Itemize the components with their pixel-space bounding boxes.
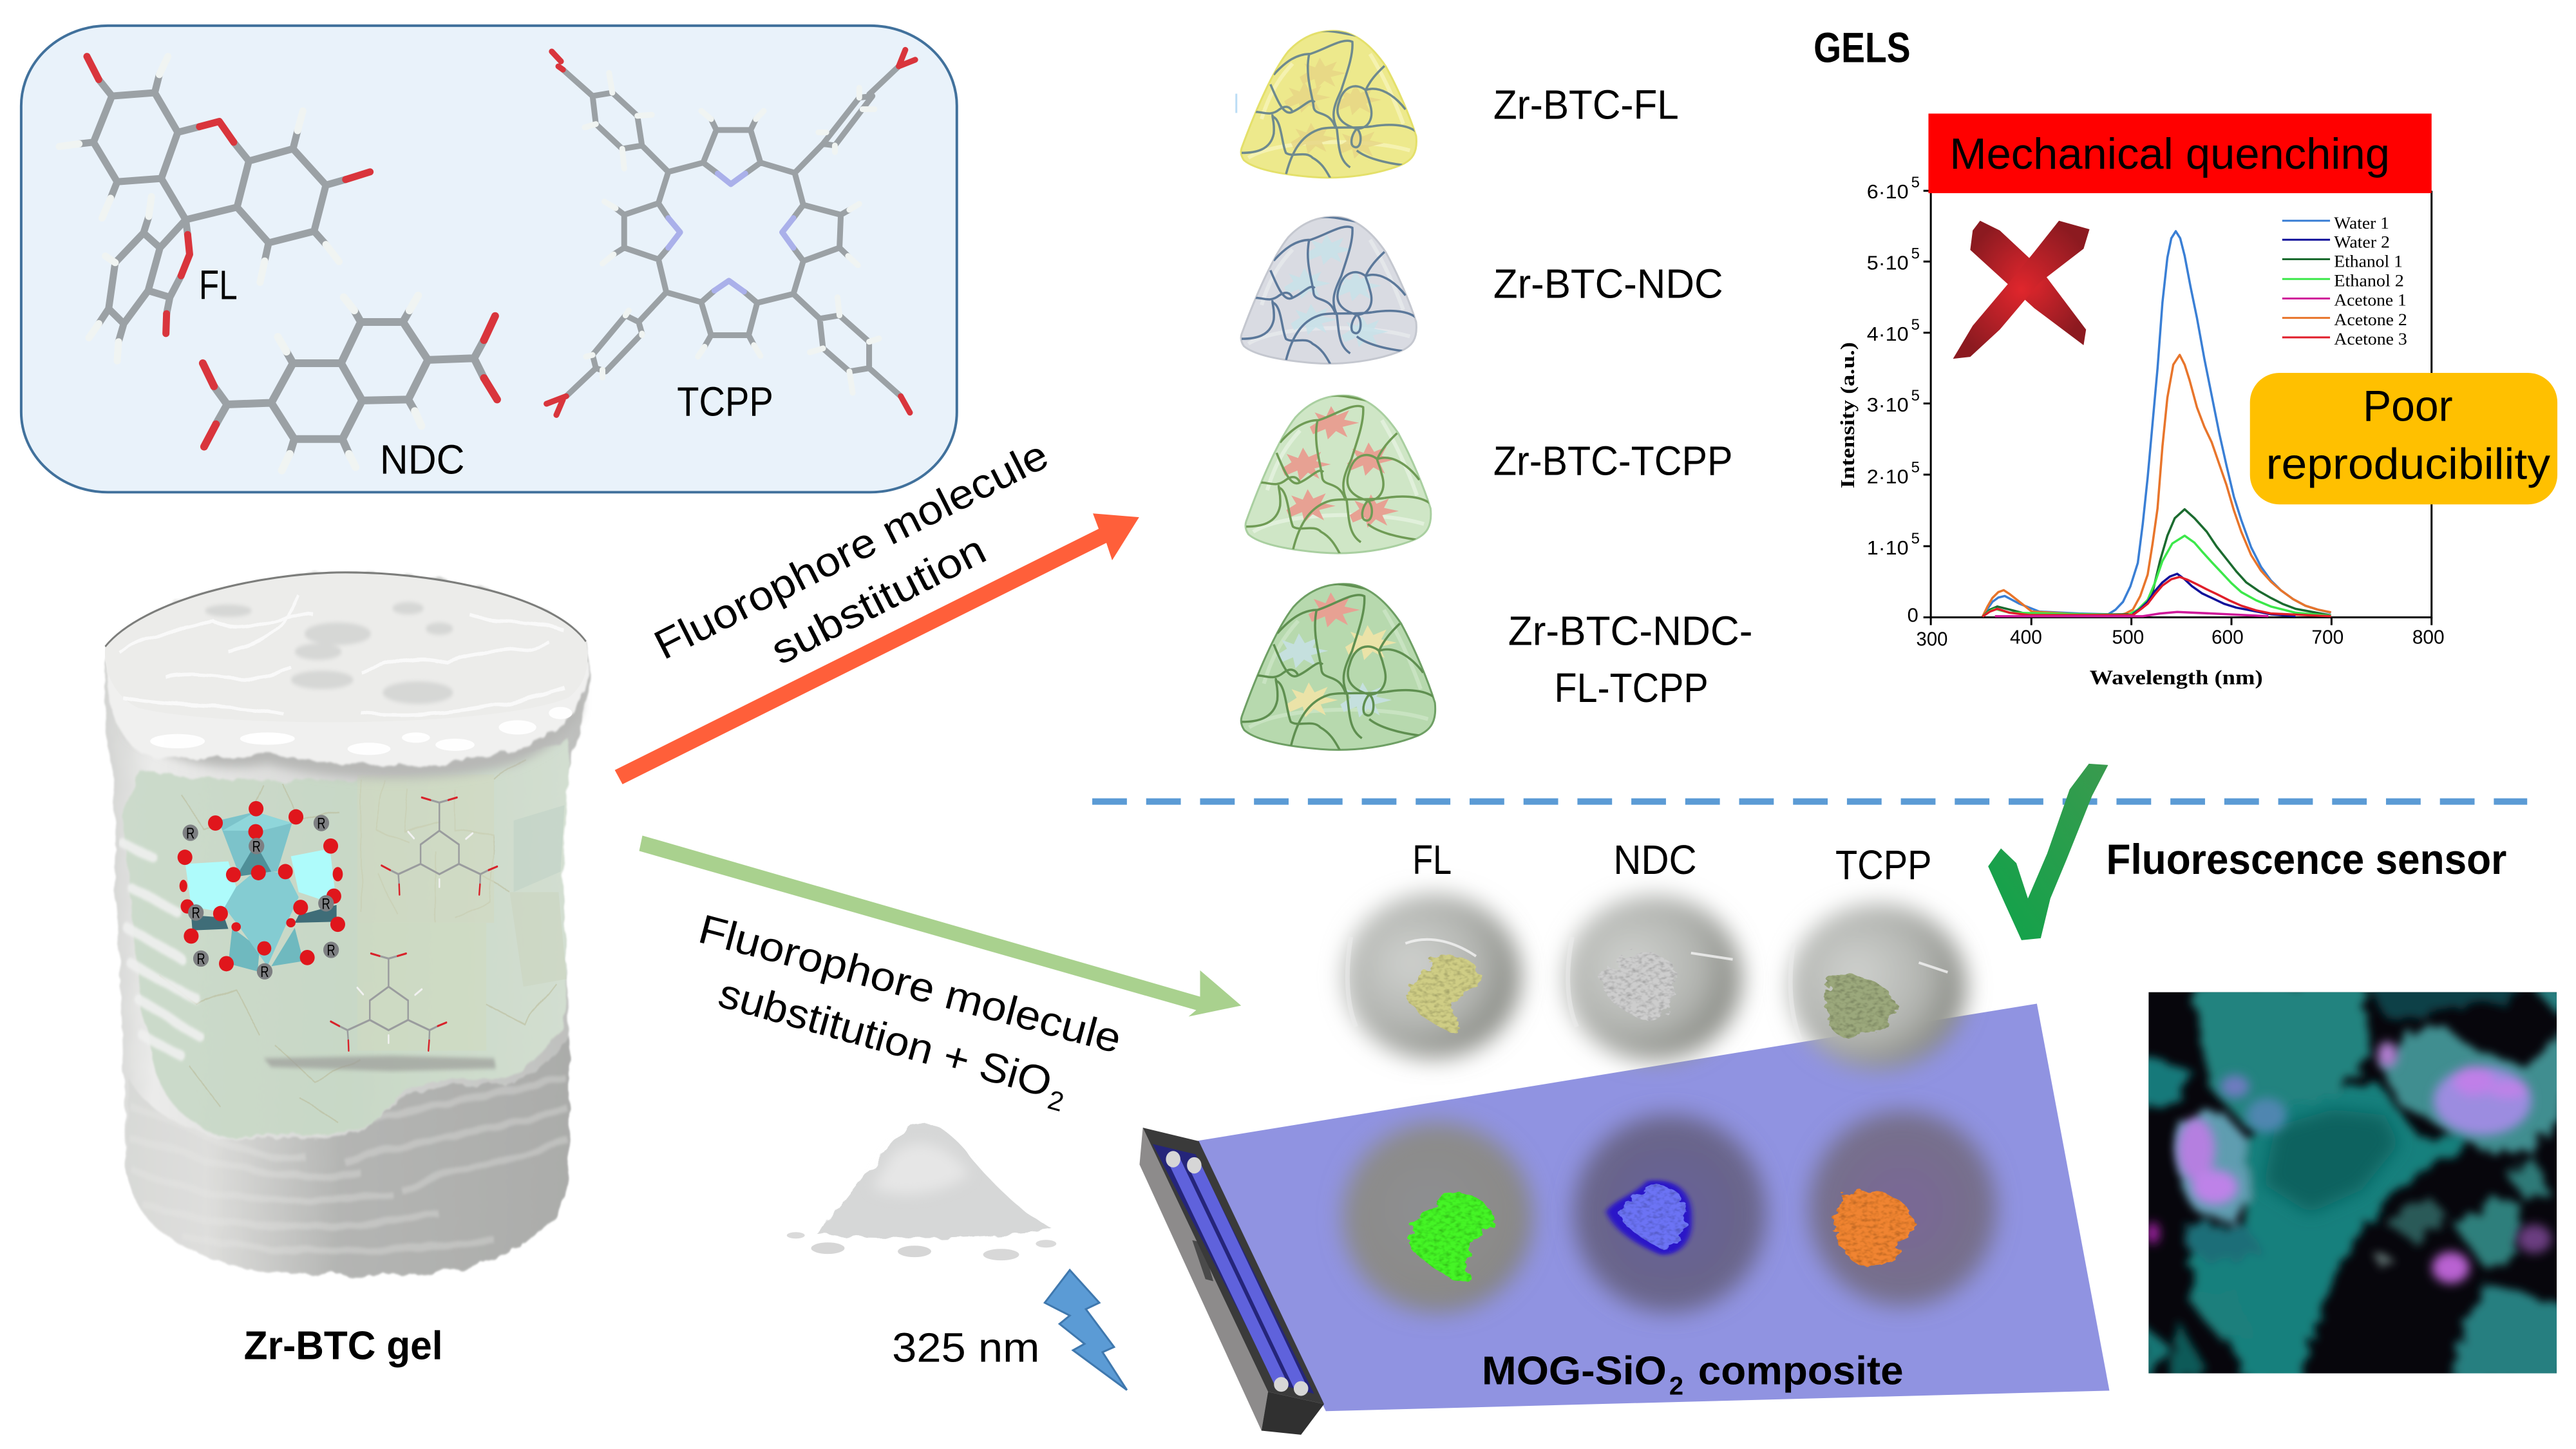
Zr cluster structure: R [252, 838, 261, 855]
labels: bowl row headings: TCPP [1835, 842, 1931, 888]
chart y tick labels: 3·10 [1867, 393, 1909, 416]
gel mid patches [357, 775, 566, 1050]
chart y tick labels: 5·10 [1867, 252, 1909, 274]
chart y tick labels: 5 [1911, 174, 1920, 191]
Zr cluster structure: R [186, 826, 194, 842]
arrow: red substitution arrow [615, 513, 1139, 784]
gel lip shadow [119, 688, 582, 779]
label: MOG-SiO2 composite: 2 [1669, 1372, 1683, 1400]
icon: SiO2 powder pile [787, 1123, 1056, 1260]
text: fluorophore molecule substitution (red arrow): Fluorophore molecule [647, 431, 1056, 668]
Zr cluster structure: R [322, 896, 330, 913]
labels: bowl row headings: NDC [1613, 837, 1697, 883]
chart axes [1924, 191, 2432, 625]
labels: gel names [1493, 81, 1752, 711]
Zr cluster structure: R [192, 905, 200, 922]
label: Fluorescence sensor: Fluorescence sensor [2107, 835, 2506, 883]
bowl: FL daylight [1344, 894, 1521, 1058]
gel cell texture [158, 759, 556, 1122]
icon: red cross [1953, 221, 2090, 359]
chart x tick labels: 400 [2010, 625, 2042, 648]
gel white streaks left [123, 844, 201, 1056]
icon: UV lamp [1139, 1128, 1324, 1435]
labels: bowl row headings [1412, 837, 1931, 888]
gel top face [105, 573, 587, 722]
gel silhouette [104, 573, 589, 1276]
label: MOG-SiO2 composite [1482, 1349, 1904, 1400]
bowl: NDC under UV [1573, 1115, 1766, 1312]
molecule: NDC [203, 296, 497, 470]
chart x tick labels: 800 [2412, 625, 2445, 648]
labels: gel names: Zr-BTC-NDC [1493, 260, 1723, 307]
gel upper lip [106, 662, 589, 766]
gel dark smear [263, 1056, 496, 1071]
chart x tick labels: 500 [2112, 625, 2144, 648]
Zr cluster structure: R [196, 951, 205, 968]
label: 325 nm: 325 nm [892, 1325, 1039, 1371]
bowl: FL under UV [1343, 1122, 1533, 1312]
chart y axis title: Intensity (a.u.) [1836, 342, 1859, 488]
BTC molecule lower [331, 954, 446, 1050]
Zr cluster structure [178, 801, 345, 981]
label: Zr-BTC gel: Zr-BTC gel [244, 1324, 443, 1368]
Zr cluster structure: R [260, 964, 269, 981]
chart x tick labels: 600 [2211, 625, 2244, 648]
chart legend text: Water 2 [2334, 233, 2390, 252]
chart y tick labels: 4·10 [1867, 323, 1909, 345]
chart x axis title: Wavelength (nm) [2090, 666, 2263, 688]
callout: poor reproducibility: reproducibility [2266, 440, 2550, 488]
gel: Zr-BTC-NDC [1241, 217, 1416, 364]
text: fluorophore molecule substitution (red arrow): substitution [763, 526, 993, 674]
panel: fluorophore molecules [21, 26, 957, 492]
chart: emission spectra [1836, 174, 2445, 688]
chart y tick labels [1867, 174, 1920, 627]
label: NDC: NDC [380, 436, 464, 482]
label: MOG-SiO2 composite: MOG-SiO [1482, 1349, 1667, 1393]
gel top dimples [205, 602, 453, 704]
text: fluorophore molecule substitution + SiO2 (green arrow) [694, 905, 1126, 1117]
chart y tick labels: 6·10 [1867, 180, 1909, 203]
labels: gel names: Zr-BTC-FL [1493, 81, 1679, 128]
chart legend text: Ethanol 1 [2334, 252, 2403, 271]
gel lower ripples [129, 1076, 566, 1251]
chart y tick labels: 5 [1911, 245, 1920, 263]
banner: mechanical quenching: Mechanical quenching [1949, 130, 2390, 178]
labels: bowl row headings: FL [1412, 837, 1452, 883]
gel lower section [127, 1036, 570, 1276]
chart y tick labels: 5 [1911, 459, 1920, 476]
chart y tick labels: 1·10 [1867, 536, 1909, 559]
arrow: green substitution arrow [639, 835, 1241, 1016]
Zr cluster structure: R [327, 942, 336, 959]
callout: poor reproducibility [2250, 373, 2557, 504]
bowl: NDC daylight [1564, 896, 1742, 1060]
chart y tick labels: 5 [1911, 530, 1920, 547]
icon: lightning bolt [1045, 1270, 1127, 1390]
chart x tick labels: 700 [2311, 625, 2344, 648]
text: fluorophore molecule substitution + SiO2 (green arrow): 2 [1045, 1084, 1067, 1117]
gel surface highlights [119, 596, 564, 715]
banner: mechanical quenching [1928, 113, 2432, 193]
chart legend text: Acetone 1 [2334, 290, 2407, 309]
label: MOG-SiO2 composite: composite [1698, 1349, 1904, 1393]
labels: gel names: Zr-BTC-NDC- [1508, 607, 1752, 654]
Zr cluster structure: R [317, 816, 326, 832]
chart legend text [2334, 214, 2407, 348]
chart legend text: Acetone 2 [2334, 310, 2407, 329]
bowl: TCPP under UV [1809, 1111, 1996, 1306]
chart y tick labels: 5 [1911, 316, 1920, 334]
text: fluorophore molecule substitution + SiO2 (green arrow): substitution + SiO [714, 970, 1057, 1106]
gel midsection [123, 739, 569, 1139]
chart legend text: Water 1 [2334, 214, 2389, 232]
gel top outline [105, 573, 586, 647]
micrograph: fluorescence microscopy image [2137, 983, 2566, 1383]
chart y tick labels: 5 [1911, 387, 1920, 404]
beam: UV light area [1196, 1004, 2109, 1411]
gel: Zr-BTC-TCPP [1245, 395, 1431, 554]
chart y tick labels: 0 [1908, 604, 1918, 627]
molecule: TCPP [547, 50, 915, 415]
chart curves [1983, 231, 2331, 616]
bowl: TCPP daylight [1789, 904, 1966, 1068]
divider: dashed separator [1092, 799, 2527, 805]
molecule: FL [59, 57, 370, 361]
callout: poor reproducibility: Poor [2363, 383, 2453, 431]
gel lip bubbles [150, 707, 573, 755]
labels: gel names: Zr-BTC-TCPP [1493, 437, 1733, 484]
chart y tick labels: 2·10 [1867, 465, 1909, 488]
text: fluorophore molecule substitution + SiO2 (green arrow): Fluorophore molecule [694, 905, 1126, 1062]
gel: Zr-BTC-FL [1241, 31, 1416, 178]
icon: green check mark [1988, 764, 2108, 940]
gel: Zr-BTC-NDC-FL-TCPP [1241, 584, 1435, 750]
labels: gel names: FL-TCPP [1555, 665, 1709, 711]
BTC molecule upper [381, 797, 497, 895]
heading: GELS: GELS [1814, 24, 1911, 71]
illustration: Zr-BTC gel cylinder [104, 573, 589, 1276]
label: TCPP: TCPP [677, 379, 773, 425]
chart x tick labels: 300 [1917, 627, 1947, 650]
micrograph dark centre [2264, 1110, 2399, 1213]
chart legend text: Ethanol 2 [2334, 271, 2404, 290]
label: FL: FL [199, 261, 238, 308]
chart x tick labels [1917, 625, 2445, 650]
chart legend text: Acetone 3 [2334, 330, 2407, 348]
chart legend lines [2282, 221, 2330, 337]
